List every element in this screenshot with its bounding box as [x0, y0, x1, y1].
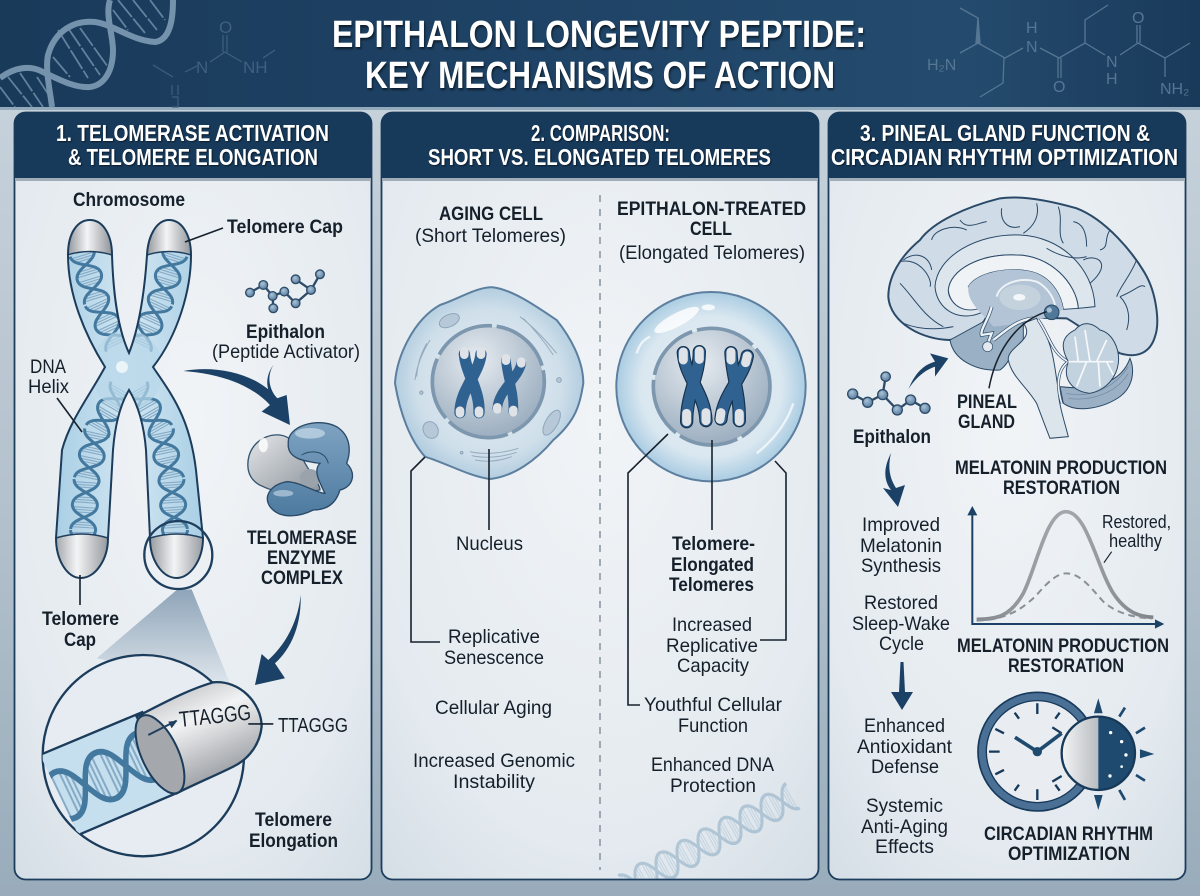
- molecule right decoration: [927, 5, 1190, 98]
- icon: telomerase enzyme complex: [248, 423, 352, 516]
- panel 1 heading: 1. TELOMERASE ACTIVATION: [56, 120, 329, 146]
- effects list: antioxidant and anti-aging: Systemic: [866, 795, 943, 817]
- leader: youthful cellular function: [628, 434, 668, 705]
- label: telomerase enzyme complex: TELOMERASE: [247, 527, 357, 549]
- label: chromosome: Chromosome: [73, 189, 185, 211]
- treated cell outcomes: Replicative: [666, 635, 758, 657]
- leader: pineal gland: [989, 312, 1047, 388]
- effects list: antioxidant and anti-aging: Defense: [871, 756, 939, 778]
- leader: telomere cap top: Telomere Cap: [227, 216, 343, 238]
- aging cell outcomes: Cellular Aging: [435, 697, 552, 719]
- label: telomere cap bottom: [42, 575, 119, 651]
- label: telomere elongation: [249, 809, 338, 852]
- label: circadian rhythm optimization: CIRCADIAN RHYTHM: [984, 823, 1153, 845]
- molecule left decoration: [153, 18, 275, 107]
- chromosome illustration: [50, 215, 206, 585]
- panel: telomerase activation: [0, 112, 372, 880]
- label: telomerase enzyme complex: ENZYME: [267, 547, 336, 569]
- label: pineal gland: [957, 391, 1017, 433]
- label: TTAGGG: TTAGGG: [278, 715, 348, 737]
- magnified telomere: [42, 520, 274, 858]
- panel 1 heading: & TELOMERE ELONGATION: [68, 144, 318, 170]
- arrow: epithalon to brain: [908, 353, 948, 389]
- effects list: melatonin and sleep: Melatonin: [860, 535, 942, 557]
- label: telomere-elongated telomeres: [669, 533, 755, 596]
- panel 2 heading: 2. COMPARISON:: [531, 120, 670, 146]
- label: DNA helix: [28, 356, 82, 432]
- label: epithalon peptide activator: (Peptide Activator): [212, 341, 360, 363]
- heading: melatonin production top: [955, 457, 1167, 499]
- title: KEY MECHANISMS OF ACTION: [365, 55, 835, 97]
- treated cell outcomes: Youthful Cellular: [644, 694, 782, 716]
- aging cell outcomes: Increased Genomic: [413, 750, 575, 772]
- arrow: enzyme to telomere: [255, 595, 301, 685]
- molecule left decoration: NH: [243, 58, 268, 77]
- label: telomerase enzyme complex: [247, 527, 357, 589]
- treated cell outcomes: Increased: [672, 614, 752, 636]
- treated cell outcomes: [644, 614, 782, 797]
- label: pineal gland: PINEAL: [957, 391, 1017, 413]
- effects list: antioxidant and anti-aging: Enhanced: [864, 715, 945, 737]
- label: telomere-elongated telomeres: Telomere-: [672, 533, 755, 555]
- header banner: [0, 0, 1200, 110]
- arrow: epithalon down: [883, 453, 905, 507]
- label: epithalon: Epithalon: [853, 426, 931, 448]
- label: telomere-elongated telomeres: Telomeres: [669, 574, 754, 596]
- sun rays: [1094, 698, 1154, 810]
- aging cell illustration: [395, 287, 583, 479]
- treated cell illustration: [616, 292, 806, 481]
- molecule right decoration: O: [1053, 79, 1065, 96]
- effects list: melatonin and sleep: Cycle: [879, 633, 924, 655]
- molecule right decoration: H: [1026, 20, 1038, 37]
- chart: melatonin curve: [967, 506, 1164, 629]
- faint DNA decoration: [618, 782, 800, 879]
- heading: epithalon-treated cell: (Elongated Telomeres): [619, 242, 805, 264]
- molecule right decoration: O: [1132, 10, 1144, 27]
- chromosomes: [460, 351, 521, 413]
- leader: increased replicative capacity: [760, 461, 786, 640]
- label: pineal gland: GLAND: [958, 411, 1015, 433]
- chart annotation: restored healthy: healthy: [1109, 531, 1162, 551]
- chart annotation: restored healthy: Restored,: [1102, 512, 1171, 532]
- label: DNA helix: DNA: [30, 356, 66, 378]
- label: TTAGGG on cap: TTAGGG: [178, 700, 252, 732]
- chart annotation: restored healthy: [1102, 512, 1171, 551]
- panel 2 heading: [428, 120, 771, 170]
- heading: epithalon-treated cell: [617, 198, 806, 264]
- panel 3 heading: [831, 120, 1178, 170]
- leader: telomere cap top: [185, 216, 343, 242]
- molecule right decoration: N: [1106, 54, 1118, 71]
- treated cell outcomes: Capacity: [677, 655, 749, 677]
- molecule right decoration: H: [1106, 71, 1118, 88]
- heading: aging cell: (Short Telomeres): [415, 225, 566, 247]
- icon: epithalon molecule: [246, 270, 324, 313]
- effects list: antioxidant and anti-aging: Anti-Aging: [861, 816, 948, 838]
- molecule right decoration: NH₂: [1160, 81, 1189, 98]
- heading: aging cell: AGING CELL: [439, 203, 543, 225]
- molecule left decoration: O: [219, 18, 232, 37]
- aging cell outcomes: Senescence: [444, 647, 544, 669]
- panel 1 heading: [56, 120, 329, 170]
- icon: epithalon molecule: [848, 372, 930, 415]
- label: telomere cap bottom: Cap: [64, 629, 96, 651]
- effects list: melatonin and sleep: Improved: [862, 514, 940, 536]
- icon: DNA helix decoration: [0, 0, 173, 107]
- effects list: melatonin and sleep: Synthesis: [861, 555, 941, 577]
- label: telomere elongation: Telomere: [255, 809, 332, 831]
- aging cell outcomes: [413, 626, 575, 793]
- heading: melatonin production bottom: [957, 635, 1169, 677]
- heading: melatonin production bottom: RESTORATION: [1008, 655, 1124, 677]
- chromosomes: [683, 351, 747, 422]
- effects list: melatonin and sleep: [852, 514, 950, 655]
- heading: epithalon-treated cell: CELL: [690, 218, 732, 240]
- effects list: melatonin and sleep: Restored: [864, 592, 938, 614]
- aging cell outcomes: Instability: [453, 771, 535, 793]
- label: nucleus: Nucleus: [456, 533, 523, 555]
- label: telomerase enzyme complex: COMPLEX: [261, 567, 343, 589]
- treated cell outcomes: Protection: [670, 775, 756, 797]
- panel: pineal gland and circadian rhythm: [828, 112, 1186, 880]
- label: telomere cap bottom: Telomere: [42, 608, 119, 630]
- icon: clock with day-night dial: [978, 692, 1154, 811]
- panel: comparison: [381, 112, 819, 896]
- label: circadian rhythm optimization: OPTIMIZATION: [1008, 843, 1130, 865]
- label: telomere elongation: Elongation: [249, 830, 338, 852]
- molecule right decoration: N: [1026, 39, 1038, 56]
- title: EPITHALON LONGEVITY PEPTIDE:: [332, 14, 866, 56]
- effects list: antioxidant and anti-aging: Antioxidant: [857, 736, 953, 758]
- effects list: melatonin and sleep: Sleep-Wake: [852, 613, 950, 635]
- panel 2 heading: SHORT VS. ELONGATED TELOMERES: [428, 144, 771, 170]
- label: circadian rhythm optimization: [984, 823, 1153, 865]
- effects list: antioxidant and anti-aging: [857, 715, 953, 858]
- heading: epithalon-treated cell: EPITHALON-TREATED: [617, 198, 806, 220]
- label: epithalon peptide activator: [212, 321, 360, 363]
- panel 3 heading: 3. PINEAL GLAND FUNCTION &: [860, 120, 1150, 146]
- title: [332, 14, 866, 97]
- heading: melatonin production top: RESTORATION: [1003, 477, 1120, 499]
- treated cell outcomes: Enhanced DNA: [651, 754, 774, 776]
- heading: aging cell: [415, 203, 566, 247]
- label: telomere-elongated telomeres: Elongated: [671, 554, 754, 576]
- heading: melatonin production top: MELATONIN PRODUCTION: [955, 457, 1167, 479]
- aging cell outcomes: Replicative: [448, 626, 540, 648]
- label: DNA helix: Helix: [28, 376, 69, 398]
- effects list: antioxidant and anti-aging: Effects: [875, 836, 934, 858]
- treated cell outcomes: Function: [678, 715, 748, 737]
- molecule left decoration: N: [196, 58, 208, 77]
- leader: nucleus: [488, 449, 490, 530]
- leader: replicative senescence: [411, 457, 440, 642]
- leader: telomere-elongated: [711, 440, 713, 530]
- label: epithalon peptide activator: Epithalon: [246, 321, 325, 343]
- arrow: to telomerase enzyme: [183, 365, 290, 425]
- molecule right decoration: H₂N: [927, 57, 956, 74]
- arrow: sleep to antioxidant: [891, 662, 913, 710]
- brain illustration: [888, 197, 1157, 438]
